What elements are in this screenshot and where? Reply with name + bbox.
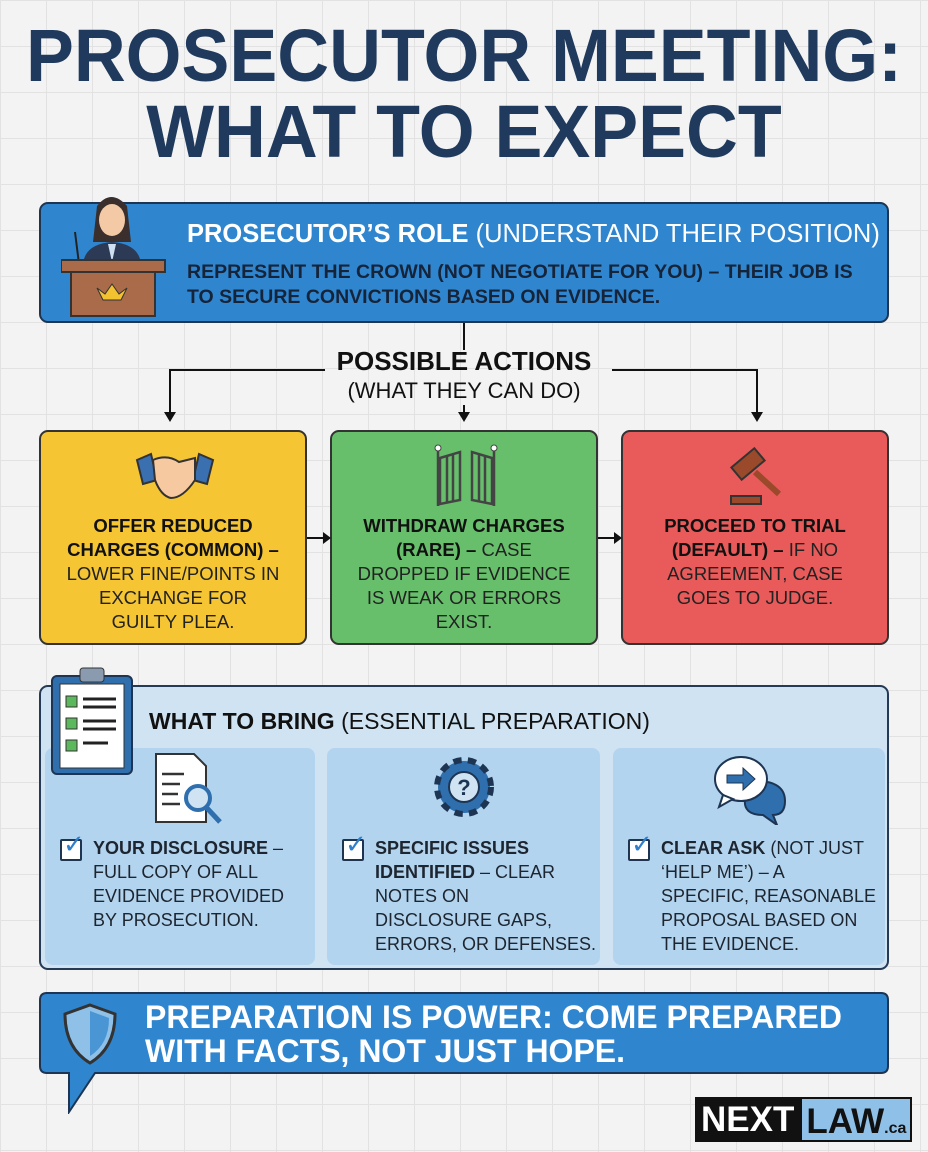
- title: WHAT TO EXPECT: [146, 90, 782, 173]
- panel: proceed to trial: (DEFAULT) – IF NO: [672, 539, 838, 560]
- arrow: connectors to actions: [164, 323, 763, 422]
- heading: possible actions: (WHAT THEY CAN DO): [347, 378, 581, 403]
- text: specific issues: NOTES ON: [375, 886, 469, 906]
- body text: REPRESENT THE CROWN (NOT NEGOTIATE FOR YOU) – THEIR JOB IS: [187, 261, 853, 283]
- text: specific issues: IDENTIFIED – CLEAR: [375, 862, 555, 882]
- text: specific issues: DISCLOSURE GAPS,: [375, 910, 552, 930]
- title: PROSECUTOR MEETING:: [26, 14, 902, 97]
- panel: withdraw charges: (RARE) – CASE: [396, 539, 532, 560]
- sub-panel: specific issues: [327, 748, 600, 965]
- text: your disclosure: YOUR DISCLOSURE –: [93, 838, 283, 858]
- panel: withdraw charges: EXIST.: [436, 611, 492, 632]
- panel: prosecutor's role: [39, 202, 889, 323]
- text: clear ask: ‘HELP ME’) – A: [661, 862, 785, 882]
- panel: proceed to trial: GOES TO JUDGE.: [677, 587, 833, 608]
- callout: preparation is power: PREPARATION IS POWER: COME PREPARED: [145, 999, 842, 1035]
- logo: nextlaw: LAW.ca: [806, 1102, 906, 1141]
- panel: withdraw charges: WITHDRAW CHARGES: [363, 515, 565, 536]
- panel: withdraw charges: IS WEAK OR ERRORS: [367, 587, 561, 608]
- icon: shield: [64, 1003, 116, 1065]
- text: specific issues: SPECIFIC ISSUES: [375, 838, 529, 858]
- panel: withdraw charges: DROPPED IF EVIDENCE: [358, 563, 570, 584]
- icon: handshake: [136, 452, 214, 499]
- panel: offer reduced charges: OFFER REDUCED: [93, 515, 253, 536]
- text: clear ask: [628, 836, 876, 954]
- icon: open gate: [434, 444, 498, 506]
- sub-panel: clear ask: [613, 748, 885, 965]
- text: specific issues: ERRORS, OR DEFENSES.: [375, 934, 596, 954]
- text: specific issues: [342, 836, 596, 954]
- title: [26, 14, 902, 173]
- logo: nextlaw: [695, 1097, 912, 1142]
- text: clear ask: PROPOSAL BASED ON: [661, 910, 857, 930]
- text: clear ask: THE EVIDENCE.: [661, 934, 799, 954]
- callout: preparation is power: [39, 992, 889, 1114]
- panel: what to bring: [39, 685, 889, 970]
- icon: clipboard: [51, 668, 133, 775]
- text: your disclosure: BY PROSECUTION.: [93, 910, 259, 930]
- icon: prosecutor at podium: [61, 197, 166, 317]
- text: clear ask: SPECIFIC, REASONABLE: [661, 886, 876, 906]
- text: your disclosure: FULL COPY OF ALL: [93, 862, 258, 882]
- text: clear ask: CLEAR ASK (NOT JUST: [661, 838, 864, 858]
- icon: document magnifier: [155, 753, 222, 824]
- heading: possible actions: POSSIBLE ACTIONS: [337, 346, 591, 376]
- icon: gear question: ?: [457, 775, 471, 800]
- arrow: between cards: [307, 532, 622, 544]
- panel: offer reduced charges: EXCHANGE FOR: [99, 587, 247, 608]
- text: your disclosure: EVIDENCE PROVIDED: [93, 886, 284, 906]
- sub-panel: your disclosure: [45, 748, 315, 965]
- body text: TO SECURE CONVICTIONS BASED ON EVIDENCE.: [187, 286, 660, 308]
- panel: proceed to trial: AGREEMENT, CASE: [667, 563, 843, 584]
- icon: gavel: [730, 446, 781, 505]
- panel: offer reduced charges: [39, 430, 307, 645]
- logo: nextlaw: NEXT: [701, 1100, 794, 1139]
- panel: offer reduced charges: LOWER FINE/POINTS IN: [67, 563, 279, 584]
- panel: offer reduced charges: CHARGES (COMMON) –: [67, 539, 279, 560]
- heading: PROSECUTOR’S ROLE (UNDERSTAND THEIR POSITION): [187, 220, 880, 248]
- panel: offer reduced charges: GUILTY PLEA.: [112, 611, 234, 632]
- heading: possible actions: [337, 346, 591, 403]
- icon: gear question: [434, 757, 494, 817]
- callout: preparation is power: WITH FACTS, NOT JUST HOPE.: [145, 1033, 625, 1069]
- body text: [187, 261, 853, 308]
- text: your disclosure: [60, 836, 284, 930]
- panel: withdraw charges: [330, 430, 598, 645]
- panel: proceed to trial: PROCEED TO TRIAL: [664, 515, 846, 536]
- icon: speech bubbles: [714, 756, 786, 825]
- panel: proceed to trial: [621, 430, 889, 645]
- heading: WHAT TO BRING (ESSENTIAL PREPARATION): [149, 708, 650, 734]
